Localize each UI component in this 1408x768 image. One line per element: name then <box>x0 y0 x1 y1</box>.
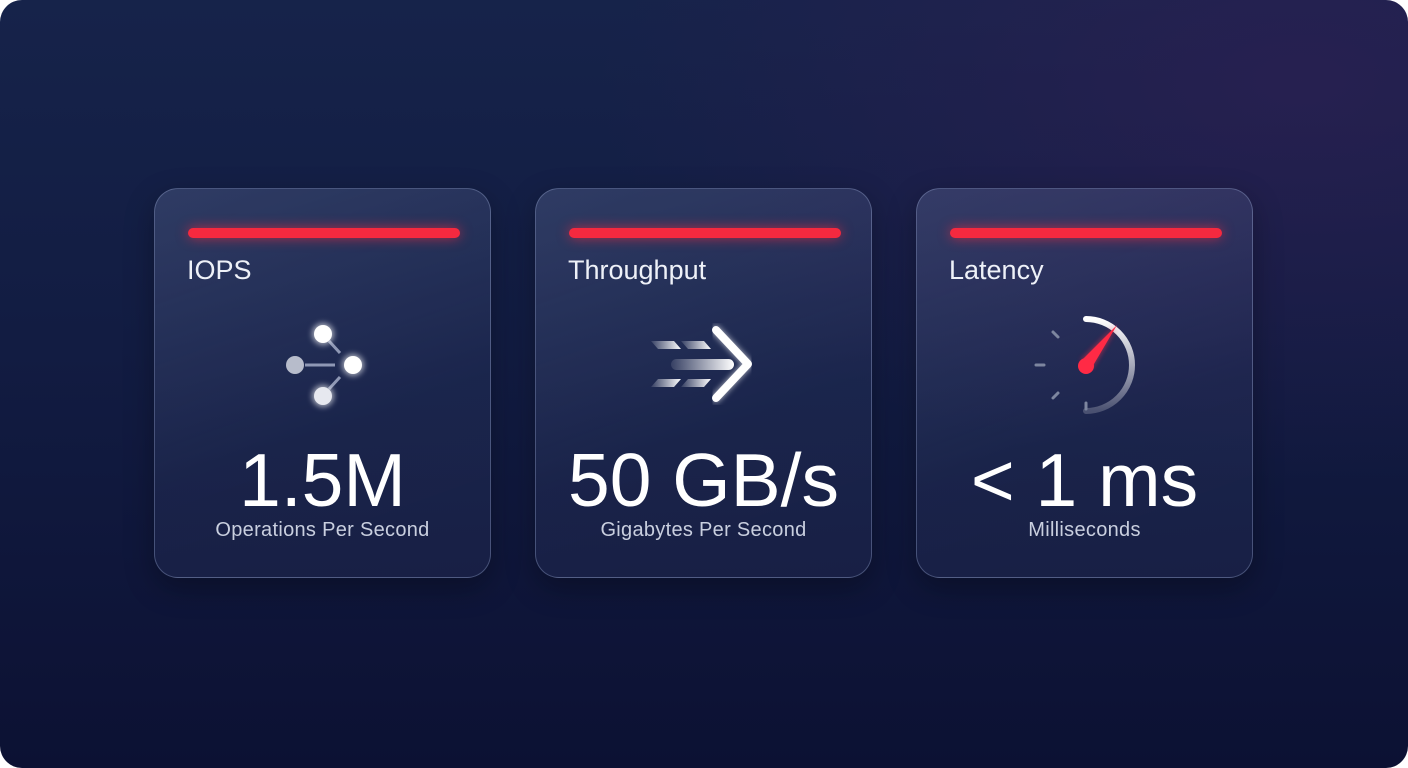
value: < 1 ms <box>971 438 1198 522</box>
card: Latency <box>916 188 1253 578</box>
heading: Throughput: Throughput <box>568 255 706 285</box>
card: IOPS <box>154 188 491 578</box>
value: 50 GB/s <box>568 438 839 522</box>
subtitle: Gigabytes Per Second <box>600 519 807 541</box>
value: 1.5M <box>239 438 406 522</box>
subtitle: Milliseconds <box>1028 519 1141 541</box>
card: Throughput <box>535 188 872 578</box>
heading: Latency: Latency <box>949 255 1044 285</box>
icon: gauge <box>1034 316 1135 414</box>
subtitle: Operations Per Second <box>215 519 430 541</box>
icon: fast arrow <box>651 323 752 405</box>
icon: nodes <box>286 319 368 411</box>
heading: IOPS: IOPS <box>187 255 252 285</box>
